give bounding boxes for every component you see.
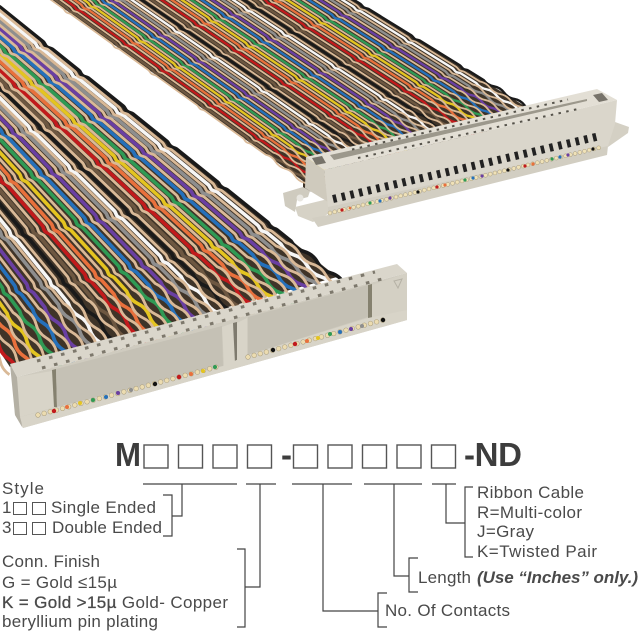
legend: style: Style (2, 479, 44, 498)
contact pins (38, 318, 387, 415)
connector: front socket (10, 264, 407, 428)
ribbon cable: front (0, 0, 345, 376)
part number heading: M (115, 436, 141, 473)
legend: connector finish: K = Gold >15µ Gold- Copper (2, 593, 228, 612)
legend: style: 1 (2, 498, 11, 517)
legend: style (2, 479, 162, 537)
legend: cable type (477, 483, 597, 561)
legend: style: 3 (2, 518, 11, 537)
legend: cable type: K=Twisted Pair (477, 542, 597, 561)
contact slots (333, 136, 600, 199)
connector lines and brackets (143, 484, 473, 627)
legend: cable type: J=Gray (477, 522, 534, 541)
legend: style: Single Ended (51, 498, 156, 517)
ribbon cable: rear (0, 0, 540, 195)
legend: connector finish: beryllium pin plating (2, 612, 158, 631)
connector: rear socket (283, 89, 629, 227)
legend: style: Double Ended (52, 518, 162, 537)
part number heading: -ND (464, 436, 522, 473)
legend: number of contacts: No. Of Contacts (385, 601, 510, 620)
legend: length: (Use “Inches” only.) (477, 568, 638, 587)
legend: connector finish (2, 552, 228, 631)
legend: cable type: R=Multi-color (477, 503, 582, 522)
part number heading: - (281, 436, 292, 473)
legend: connector finish: Conn. Finish (2, 552, 100, 571)
contact pins (330, 147, 602, 213)
legend: length: Length (418, 568, 471, 587)
legend: connector finish: G = Gold ≤15µ (2, 573, 117, 592)
part number heading (115, 436, 522, 473)
legend: cable type: Ribbon Cable (477, 483, 584, 502)
keying mark (394, 279, 402, 288)
